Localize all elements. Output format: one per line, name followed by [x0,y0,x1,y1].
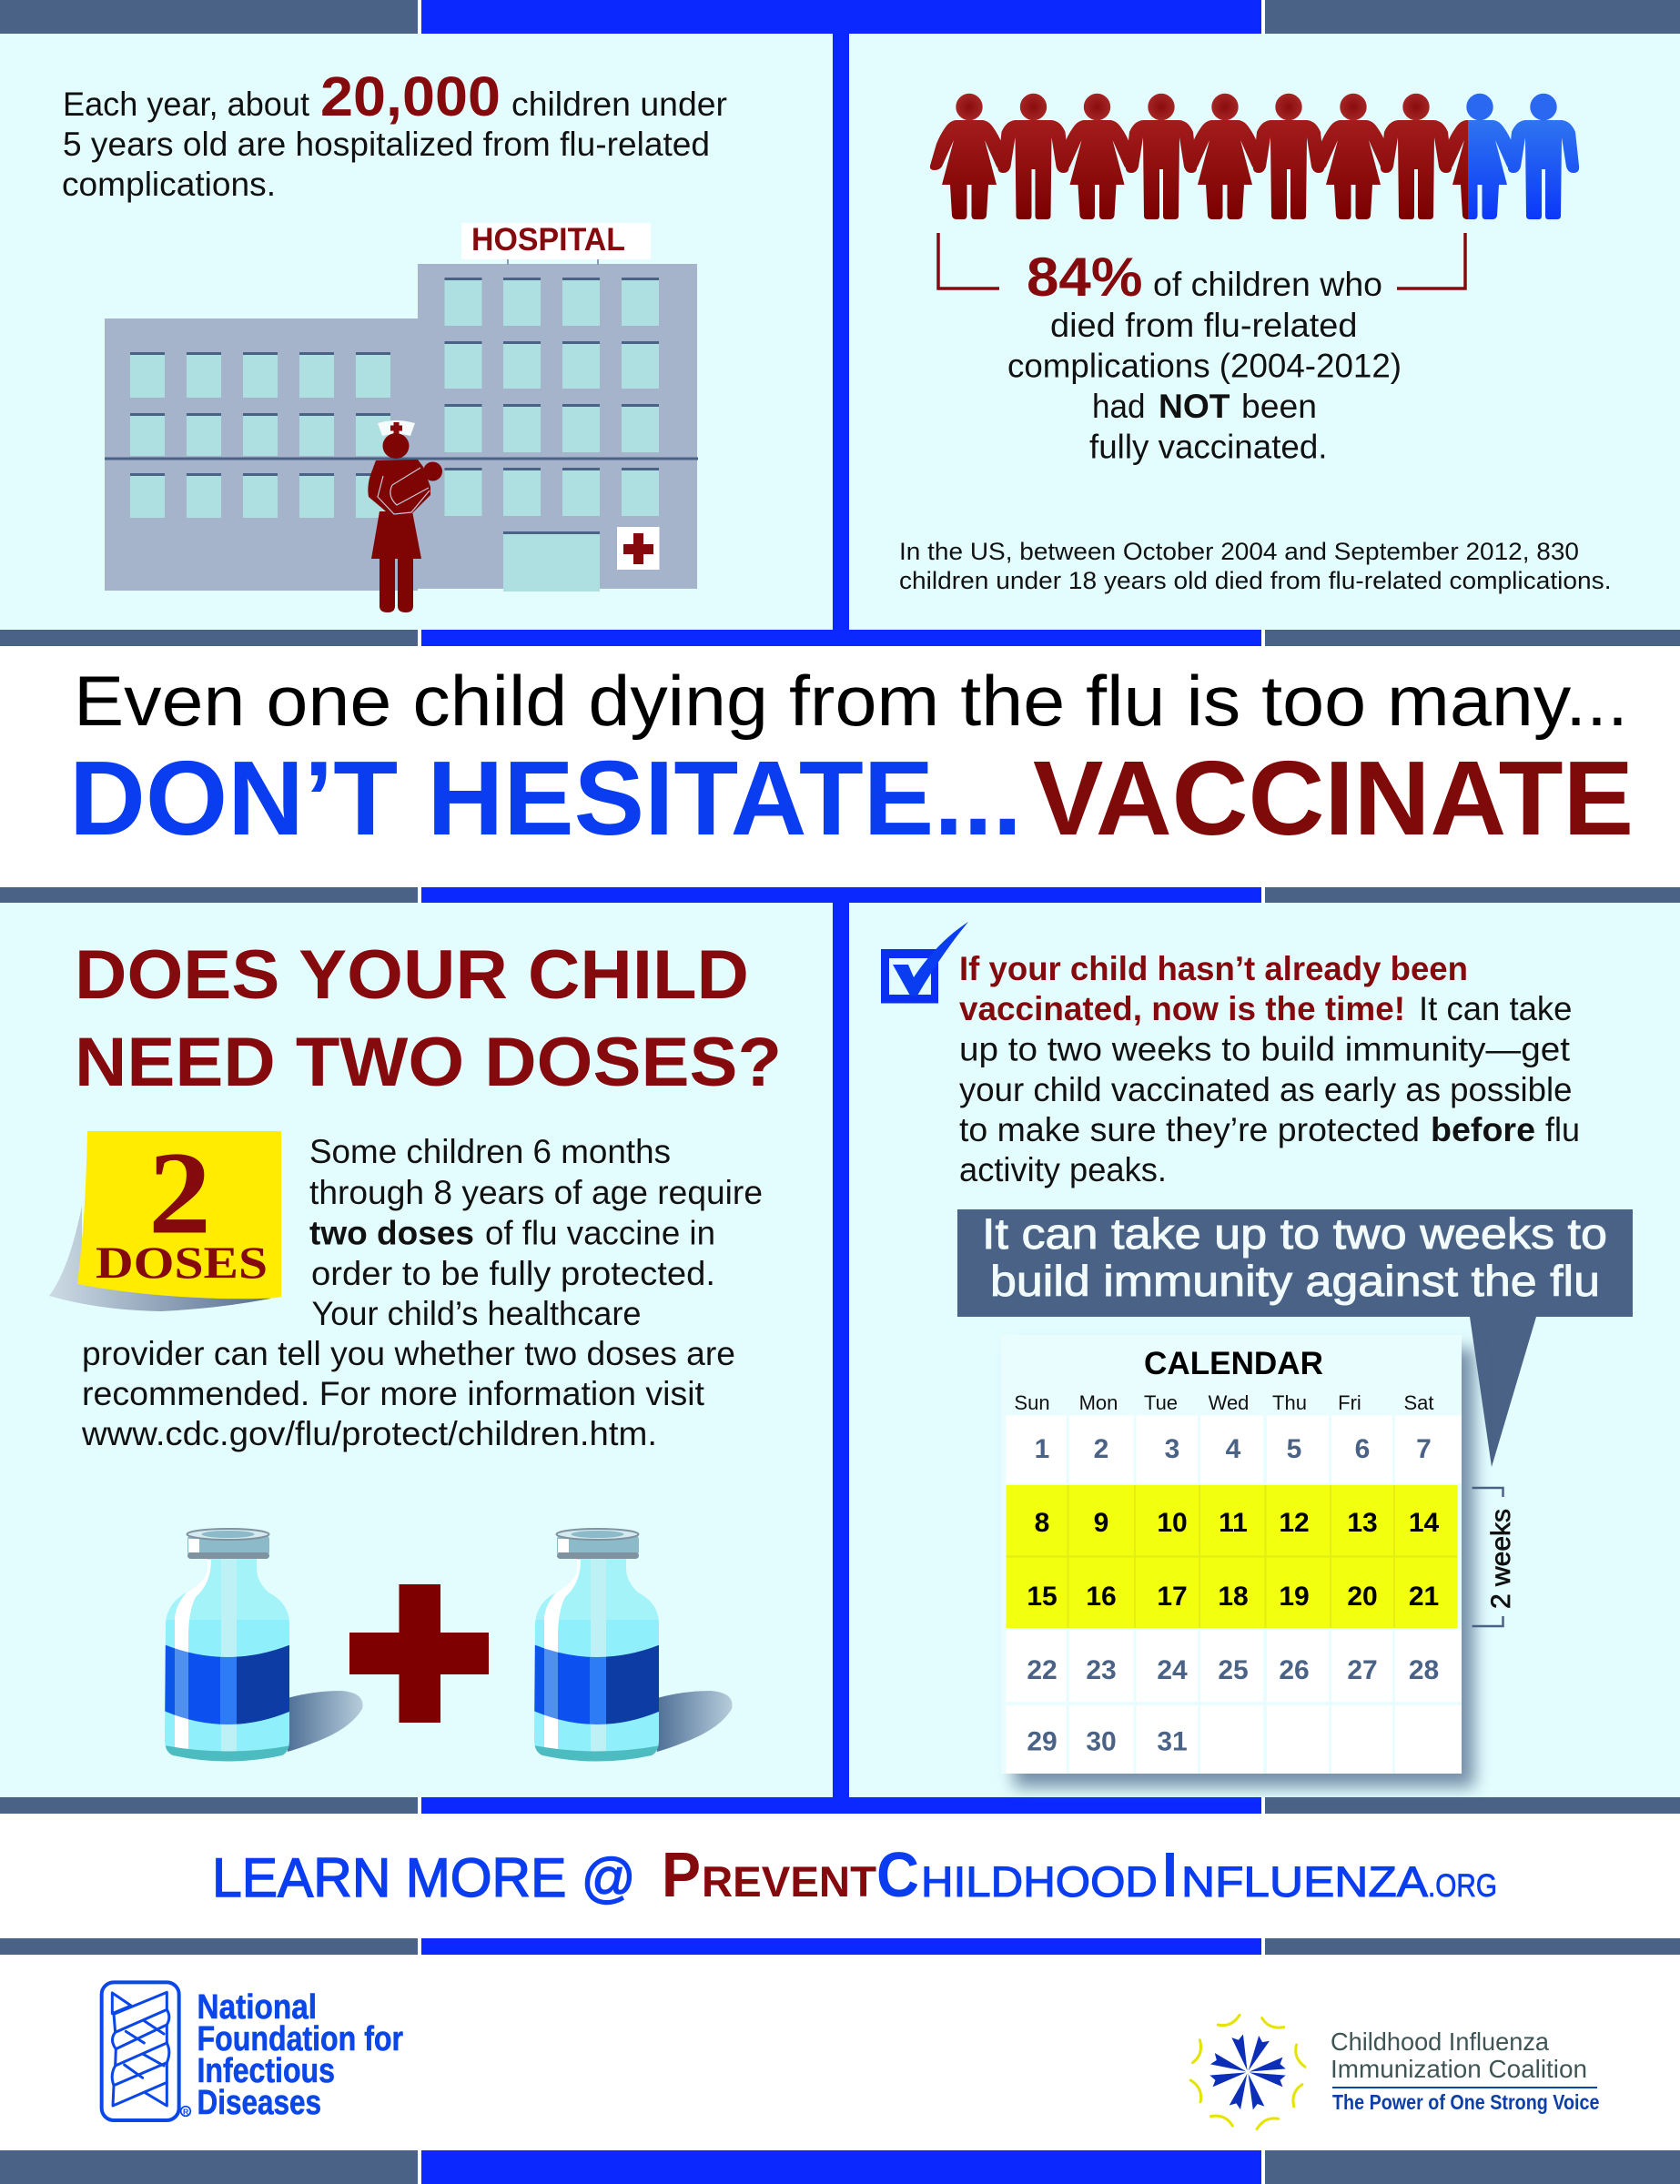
icon: sticky note 2 doses: DOSES [96,1237,268,1288]
text block: two doses explanation: two doses [309,1214,474,1252]
text block: now is the time: up to two weeks to build immunity—get [959,1030,1571,1068]
text block: two doses explanation: recommended. For more information visit [82,1375,705,1412]
link: learn more at PreventChildhoodInfluenza.org: C [876,1839,919,1910]
logo mark: blue star with yellow arcs [1190,2015,1305,2129]
week 3 dates: 20 [1347,1582,1378,1612]
weekday headers: Sun [1014,1391,1050,1414]
hospital door [503,531,600,592]
text block: 830 children footnote: children under 18 years old died from flu-related complications. [899,567,1611,594]
top header band [0,0,1680,34]
text block: two doses explanation: Some children 6 months [309,1133,671,1170]
link: learn more at PreventChildhoodInfluenza.org [212,1839,1497,1910]
text block: two doses explanation: provider can tell you whether two doses are [82,1335,735,1372]
illustration: hospital building [105,222,698,592]
panel: deaths background [849,34,1680,630]
panel: two doses background [0,903,833,1797]
icon: sticky note 2 doses: 2 [148,1128,211,1259]
text block: 830 children footnote [899,538,1611,594]
logo mark: helix: R [183,2107,189,2116]
text block: 830 children footnote: In the US, between October 2004 and September 2012, 830 [899,538,1579,565]
week 2 dates: 11 [1219,1508,1248,1538]
calendar [1001,1335,1474,1787]
week 5 dates: 31 [1157,1727,1188,1756]
vertical divider bottom [833,903,849,1797]
text block: now is the time: If your child hasn’t already been [959,950,1468,987]
weekday headers: Thu [1272,1391,1307,1414]
blue figures [1468,120,1580,219]
logo wordmark [1331,2027,1600,2114]
bottom band [0,2150,1680,2184]
text block: 84% not vaccinated: fully vaccinated. [1089,428,1327,466]
logo wordmark: Foundation for [197,2020,403,2058]
week 5 dates [1027,1727,1188,1756]
week 4 dates [1027,1655,1439,1685]
heading: don't hesitate vaccinate: VACCINATE [1033,739,1634,857]
callout: two weeks speech bubble [957,1209,1633,1467]
logo wordmark: Infectious [197,2052,335,2090]
text block: 84% not vaccinated: of children who [1153,266,1382,303]
weekday headers [1014,1391,1434,1414]
text block: now is the time [959,950,1580,1188]
week 3 dates [1027,1582,1439,1612]
text block: 84% not vaccinated: 84% [1027,247,1143,308]
week 2 dates: 10 [1157,1508,1188,1538]
week 1 dates [1035,1434,1432,1464]
logo wordmark: Childhood Influenza [1331,2027,1549,2056]
week 1 dates: 6 [1355,1434,1370,1464]
text block: now is the time: flu [1545,1111,1580,1148]
weekday headers: Tue [1144,1391,1178,1414]
week 1 dates: 7 [1416,1434,1432,1464]
icon: checkbox with checkmark [881,922,968,1003]
text block: now is the time: your child vaccinated as early as possible [959,1071,1573,1108]
weekday headers: Mon [1079,1391,1118,1414]
logo: Childhood Influenza Immunization Coalition [1190,2015,1600,2129]
bracket: 84 percent span [938,233,1465,288]
week 3 dates: 17 [1157,1582,1188,1612]
logo wordmark [197,1988,403,2122]
link: learn more at PreventChildhoodInfluenza.org: .ORG [1428,1868,1497,1904]
heading: does your child need two doses: DOES YOUR CHILD [75,936,749,1014]
week 4 dates: 22 [1027,1655,1058,1685]
highlighted two weeks [1007,1485,1458,1628]
text block: two doses explanation: Your child’s healthcare [311,1295,641,1332]
heading: even one child: Even one child dying from the flu is too many... [74,661,1628,741]
week 5 dates: 30 [1086,1727,1117,1756]
band above lower panels [0,887,1680,903]
week 1 dates: 2 [1094,1434,1108,1464]
band under lower panels [0,1797,1680,1814]
week 2 dates: 12 [1279,1508,1310,1538]
text block: 84% not vaccinated: been [1241,388,1317,425]
windows: left wing [130,354,390,518]
text block: 20,000 children hospitalized: 5 years old are hospitalized from flu-related [63,126,710,163]
logo wordmark: Diseases [197,2084,321,2122]
week 1 dates: 4 [1226,1434,1241,1464]
link: learn more at PreventChildhoodInfluenza.org: REVENT [702,1857,876,1906]
weekday headers: Fri [1338,1391,1361,1414]
text block: two doses explanation: order to be fully protected. [311,1255,715,1292]
heads [956,94,1430,120]
panel: timing background [849,903,1680,1797]
heading: does your child need two doses [75,936,782,1101]
icon: vaccine vial left [159,1529,363,1774]
week 4 dates: 26 [1279,1655,1310,1685]
text block: 20,000 children hospitalized: children under [511,86,727,123]
icon: vaccine vial right [529,1529,733,1774]
week 3 dates: 15 [1027,1582,1058,1612]
link: learn more at PreventChildhoodInfluenza.org: LEARN MORE @ [212,1847,635,1908]
week 3 dates: 18 [1218,1582,1249,1612]
text block: 20,000 children hospitalized [62,66,727,203]
text block: 84% not vaccinated: had [1092,388,1145,425]
week 4 dates: 23 [1086,1655,1117,1685]
link: learn more at PreventChildhoodInfluenza.org: HILDHOOD [921,1857,1158,1906]
text block: 84% not vaccinated: NOT [1159,388,1230,425]
red figures [930,120,1519,219]
bracket: 2 weeks label: 2 weeks [1486,1509,1516,1609]
text block: 20,000 children hospitalized: complications. [62,166,276,203]
week 3 dates: 19 [1279,1582,1310,1612]
week 3 dates: 21 [1409,1582,1439,1612]
week 2 dates: 13 [1347,1508,1378,1538]
icon: plus sign [349,1584,489,1723]
week 2 dates: 8 [1035,1508,1049,1538]
week 4 dates: 24 [1157,1655,1188,1685]
week 4 dates: 25 [1218,1655,1249,1685]
week 3 dates: 16 [1086,1582,1117,1612]
text block: now is the time: It can take [1419,990,1573,1027]
logo wordmark: Immunization Coalition [1331,2055,1587,2083]
week 1 dates: 5 [1287,1434,1301,1464]
panel: hospitalizations background [0,34,833,630]
week 2 dates: 14 [1409,1508,1439,1538]
logo: National Foundation for Infectious Diseases [102,1982,403,2122]
logo wordmark: National [197,1988,317,2027]
link: learn more at PreventChildhoodInfluenza.org: I [1162,1839,1178,1910]
week 4 dates: 28 [1409,1655,1439,1685]
heading: don't hesitate vaccinate [69,739,1634,857]
text block: 20,000 children hospitalized: 20,000 [320,66,501,127]
text block: two doses explanation: of flu vaccine in [485,1214,715,1252]
callout: two weeks speech bubble: It can take up to two weeks to [982,1209,1607,1258]
week 1 dates: 3 [1165,1434,1179,1464]
week 1 dates: 1 [1035,1434,1049,1464]
text block: now is the time: before [1431,1111,1535,1148]
text block: two doses explanation: www.cdc.gov/flu/protect/children.htm. [81,1415,657,1452]
text block: 84% not vaccinated [1007,247,1402,466]
calendar title: CALENDAR [1144,1346,1323,1381]
week 2 dates: 9 [1094,1508,1108,1538]
text block: now is the time: to make sure they’re protected [959,1111,1420,1148]
text block: 84% not vaccinated: died from flu-related [1050,307,1358,344]
heading: don't hesitate vaccinate: DON’T HESITATE... [69,739,1022,857]
text block: now is the time: vaccinated, now is the time! [959,990,1405,1027]
window lintels [105,278,698,476]
calendar cells [1007,1416,1462,1774]
weekday headers: Wed [1209,1391,1249,1414]
week 4 dates: 27 [1347,1655,1378,1685]
logo mark: helix [102,1982,190,2120]
text block: two doses explanation [81,1133,763,1452]
hospital sign [461,222,651,265]
link: learn more at PreventChildhoodInfluenza.org: NFLUENZA [1181,1857,1429,1906]
heading: does your child need two doses: NEED TWO DOSES? [75,1024,782,1101]
vertical divider top [833,34,849,630]
week 5 dates: 29 [1027,1727,1058,1756]
icon: sticky note 2 doses [49,1128,281,1311]
weekday headers: Sat [1403,1391,1434,1414]
icon: red cross sign [617,527,659,570]
band under top panels [0,630,1680,646]
link: learn more at PreventChildhoodInfluenza.org: P [662,1839,701,1910]
text block: now is the time: activity peaks. [959,1151,1167,1188]
bracket: 2 weeks label [1473,1488,1516,1626]
text block: 84% not vaccinated: complications (2004-2012) [1007,348,1402,384]
windows: right wing [444,279,659,516]
icon row: ten people holding hands [930,94,1579,219]
text block: two doses explanation: through 8 years of age require [309,1174,763,1211]
text block: 20,000 children hospitalized: Each year, about [63,86,310,123]
icon: nurse holding baby [368,420,442,612]
logo wordmark: The Power of One Strong Voice [1332,2090,1600,2114]
week 2 dates [1035,1508,1439,1538]
band above logos [0,1938,1680,1955]
hospital sign: HOSPITAL [471,222,625,258]
callout: two weeks speech bubble: build immunity against the flu [990,1257,1600,1305]
